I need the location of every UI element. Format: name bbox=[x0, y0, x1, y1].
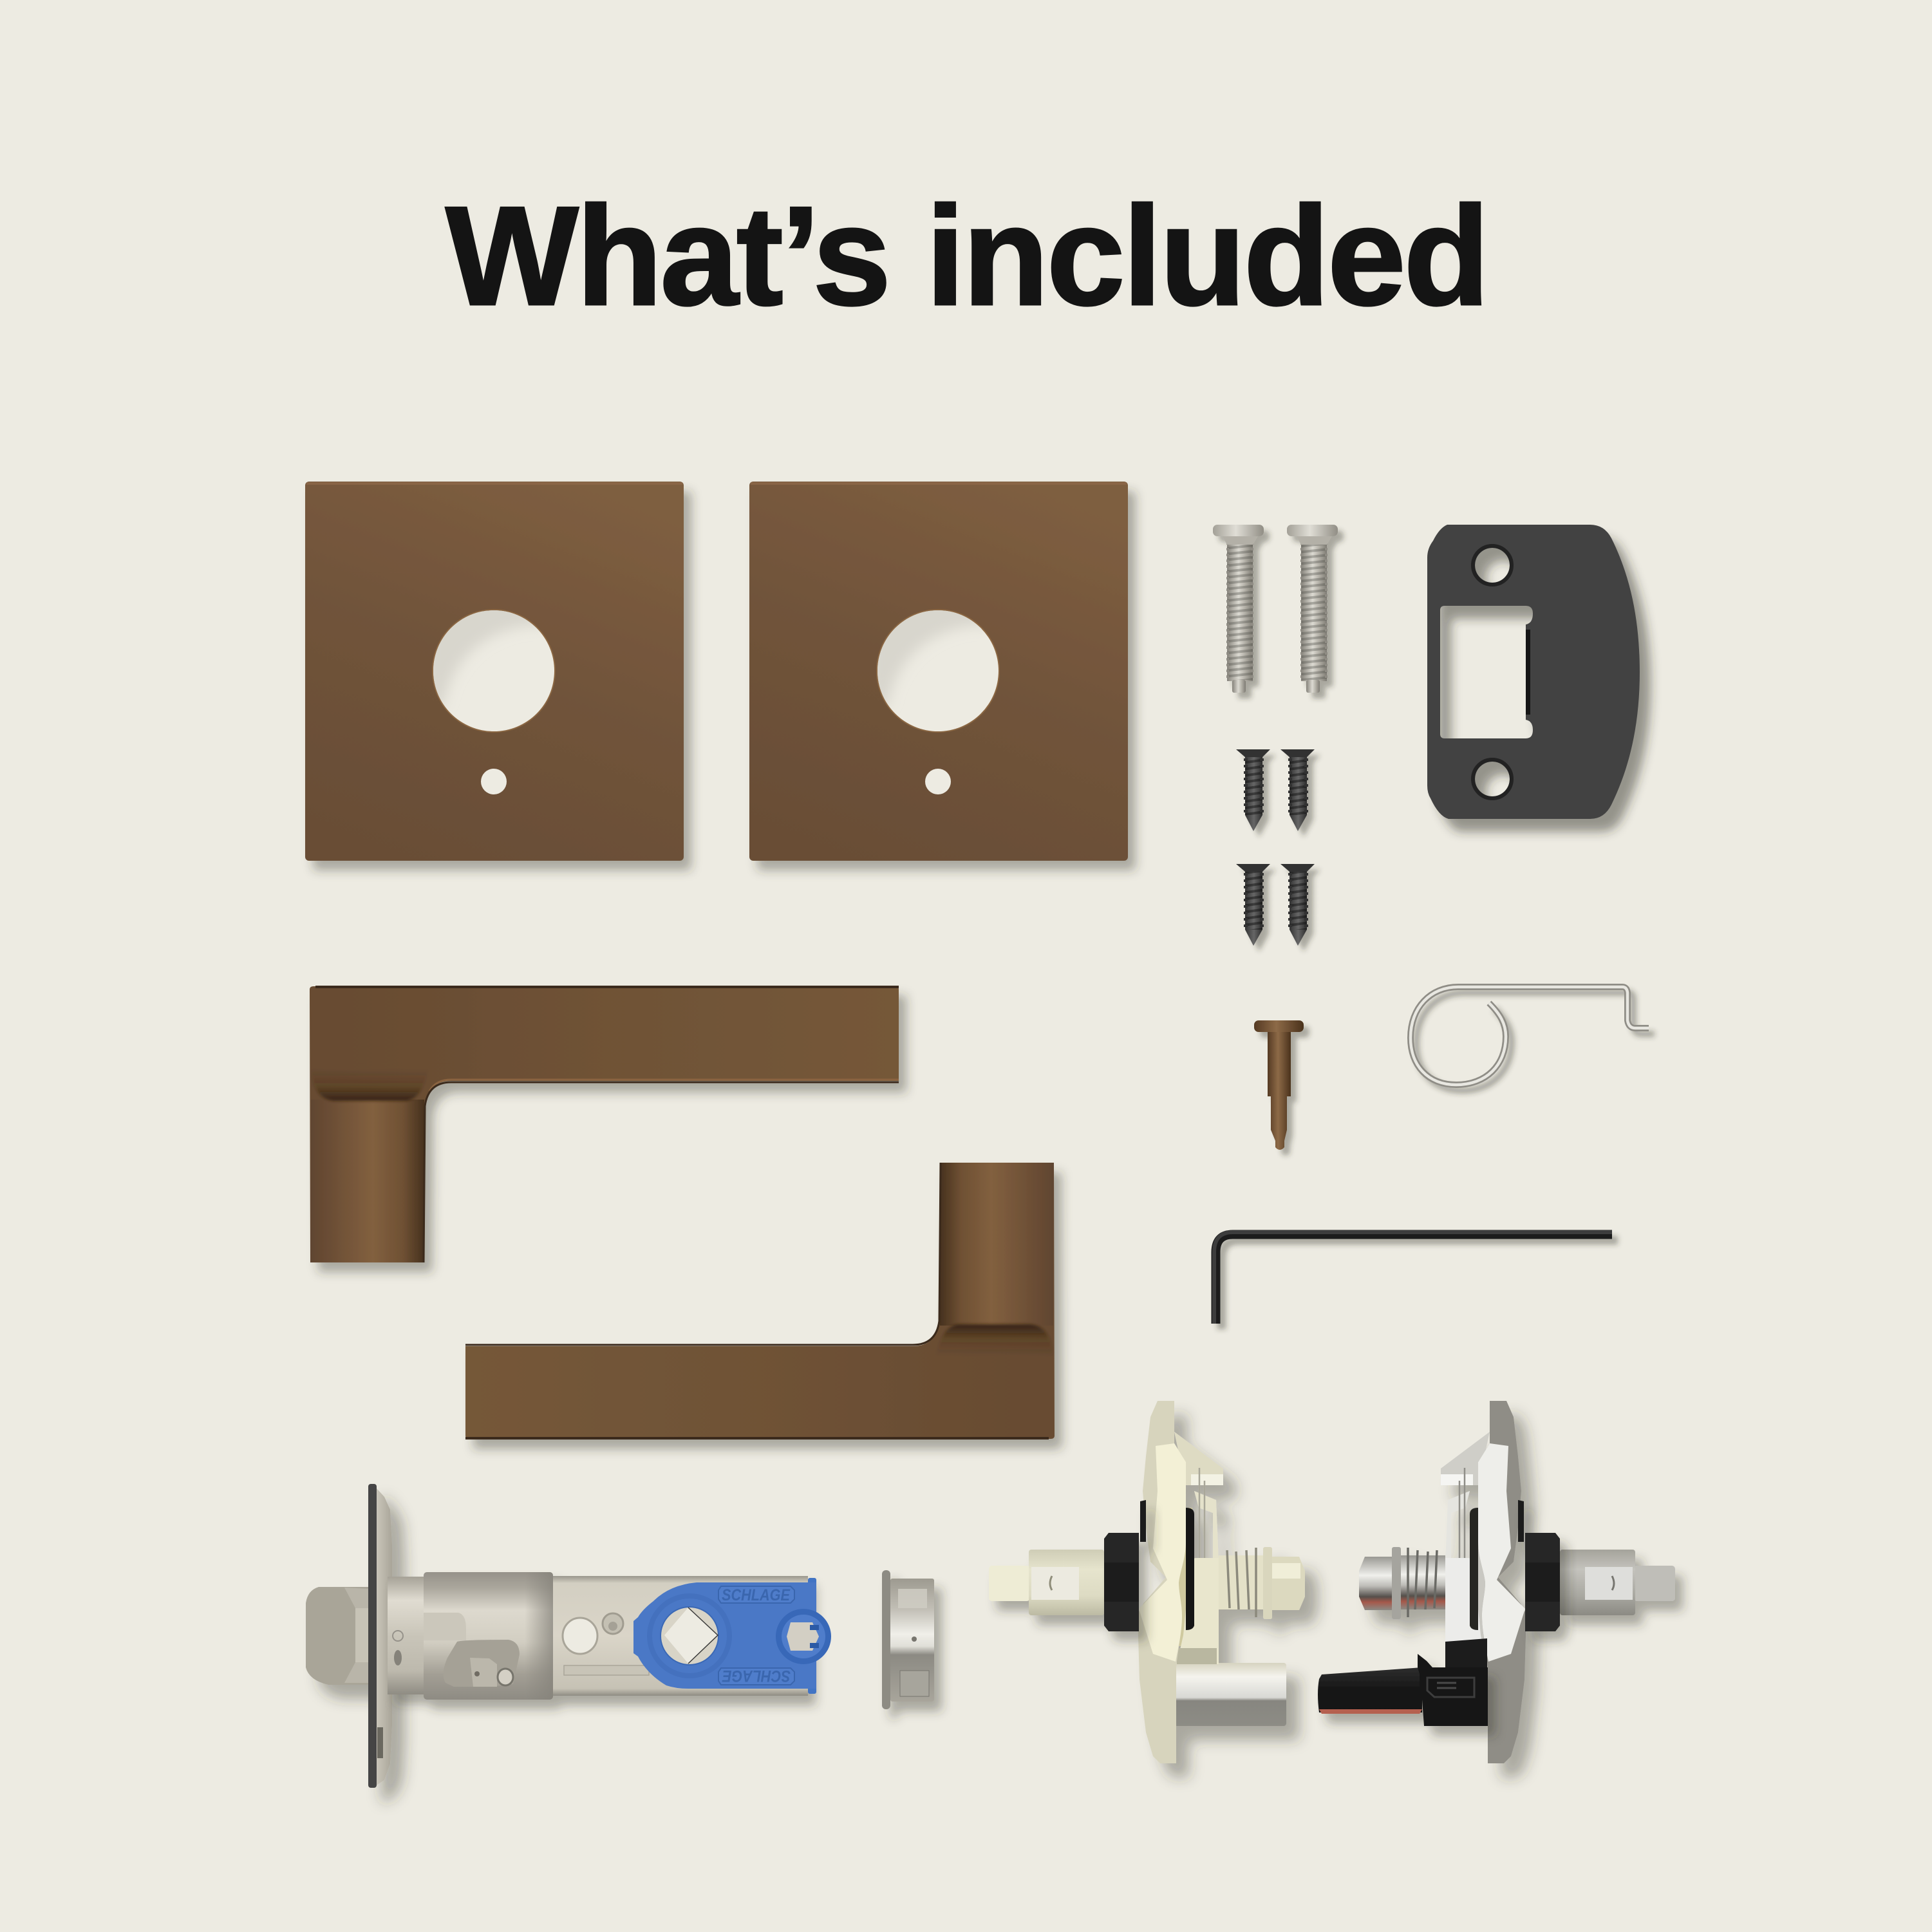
cream shaft bbox=[989, 1550, 1104, 1615]
wood screw row 2 left bbox=[1236, 864, 1270, 946]
wood screw row 1 right bbox=[1280, 749, 1315, 831]
title: What’s included bbox=[445, 178, 1490, 335]
chrome plate and parts bbox=[1359, 1401, 1526, 1763]
wiring connector bbox=[1318, 1654, 1488, 1726]
chrome shaft bbox=[1560, 1550, 1675, 1615]
brand mark: lower: SCHLAGE bbox=[722, 1667, 791, 1685]
machine screw 1 bbox=[1213, 525, 1264, 693]
lower lever handle bbox=[465, 1163, 1055, 1440]
latch assembly bbox=[306, 1484, 831, 1788]
brand mark: upper: SCHLAGE bbox=[722, 1586, 791, 1604]
black knob right bbox=[1518, 1500, 1560, 1631]
torsion wire spring bbox=[1411, 987, 1649, 1085]
latch plate and bolt bbox=[306, 1484, 392, 1788]
outside mounting assembly: chrome bbox=[1318, 1401, 1675, 1763]
strike plate bbox=[1427, 525, 1640, 819]
upper lever handle bbox=[310, 986, 899, 1262]
wood screw row 2 right bbox=[1280, 864, 1315, 946]
black knob left bbox=[1104, 1500, 1146, 1631]
wood screw row 1 left bbox=[1236, 749, 1270, 831]
blue plastic retainer bbox=[633, 1578, 831, 1694]
inside mounting assembly: cream bbox=[989, 1401, 1305, 1763]
cream plate and parts bbox=[1138, 1401, 1305, 1763]
hex key bbox=[1214, 1232, 1612, 1324]
machine screw 2 bbox=[1287, 525, 1338, 693]
latch body bbox=[388, 1572, 808, 1700]
brown drive pin bbox=[1254, 1020, 1304, 1150]
escutcheon plate: left bbox=[305, 482, 684, 861]
escutcheon plate: right bbox=[749, 482, 1128, 861]
latch collar nut bbox=[882, 1570, 934, 1709]
